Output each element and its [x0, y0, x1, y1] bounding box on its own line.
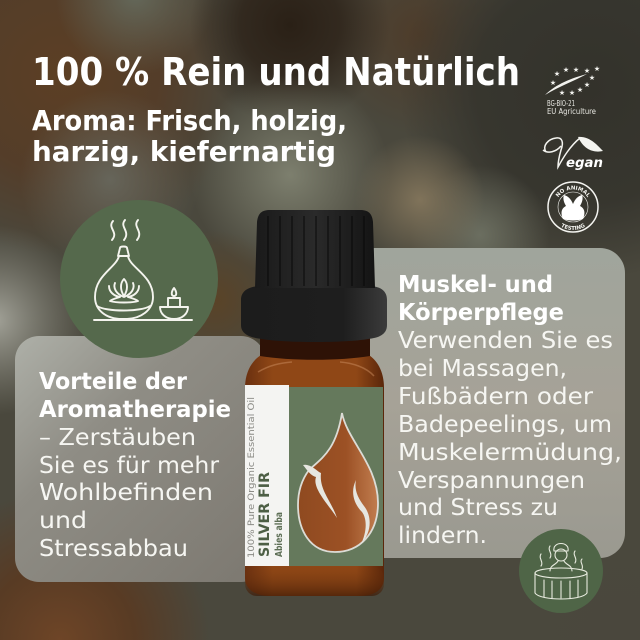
icon: EU organic leaf logo: ★: [584, 67, 590, 75]
text block: muscle and body care: Muskel- und: [398, 272, 553, 298]
text block: muscle and body care: Verspannungen: [398, 468, 585, 494]
text block: muscle and body care: Badepeelings, um: [398, 412, 612, 438]
label text: latin name: Abies alba: [274, 512, 285, 557]
title: 100 % Rein und Natürlich: [32, 50, 520, 94]
bottle: [241, 210, 387, 596]
icon: EU organic leaf logo: ★: [589, 74, 595, 82]
text block: muscle and body care: Muskelermüdung,: [398, 440, 622, 466]
icon: no animal testing logo: NO ANIMAL: [556, 186, 590, 198]
icon: vegan logo: [543, 137, 603, 171]
text block: aromatherapy benefits: Stressabbau: [39, 536, 188, 562]
icon: EU organic leaf logo: ★: [594, 65, 600, 73]
panel: muscle and body care: [350, 248, 625, 558]
text block: aromatherapy benefits: Wohlbefinden: [39, 480, 213, 506]
black screw cap: [255, 210, 375, 288]
icon: no animal testing logo: [547, 181, 599, 233]
text block: muscle and body care: Körperpflege: [398, 300, 564, 326]
icon: bath tub in green circle: [519, 529, 603, 613]
subtitle: aroma: [32, 104, 347, 168]
icon: EU organic leaf logo: ★: [554, 70, 560, 78]
text block: muscle and body care: Fußbädern oder: [398, 384, 594, 410]
icon: diffuser in green circle: [60, 200, 218, 358]
cap ribs: [268, 216, 364, 286]
subtitle: aroma: Aroma: Frisch, holzig,: [32, 104, 347, 137]
bottle neck: [260, 338, 370, 360]
text block: aromatherapy benefits: [39, 369, 231, 562]
label text: organic oil line: 100% Pure Organic Essential Oil: [247, 397, 257, 558]
icon: no animal testing logo: TESTING: [562, 223, 585, 230]
dropper collar: [241, 286, 387, 342]
icon: EU organic leaf logo: ★: [563, 66, 569, 74]
bottle glass: [245, 351, 384, 596]
text block: aromatherapy benefits: und: [39, 508, 87, 534]
icon: EU organic leaf logo: ★: [569, 89, 575, 97]
icon: EU organic leaf logo: ★: [573, 66, 579, 74]
icon: label drop: [298, 413, 378, 552]
label text: product name: SILVER FIR: [257, 472, 273, 557]
subtitle: aroma: harzig, kiefernartig: [32, 135, 336, 168]
icon: EU organic leaf logo: EU Agriculture: [547, 107, 596, 116]
text block: muscle and body care: bei Massagen,: [398, 356, 567, 382]
text block: muscle and body care: und Stress zu: [398, 495, 558, 521]
text block: muscle and body care: Verwenden Sie es: [398, 328, 613, 354]
label: green panel: [289, 387, 383, 566]
text block: aromatherapy benefits: Aromatherapie: [39, 397, 231, 423]
label: white strip: [245, 385, 289, 566]
text block: muscle and body care: [398, 272, 622, 549]
icon: vegan logo: egan: [566, 156, 603, 171]
icon: EU organic leaf logo: ★: [577, 86, 583, 94]
text block: aromatherapy benefits: Sie es für mehr: [39, 453, 220, 479]
text block: muscle and body care: lindern.: [398, 523, 487, 549]
icon: EU organic leaf logo: ★: [559, 89, 565, 97]
icon: EU organic leaf logo: ★: [584, 81, 590, 89]
text block: aromatherapy benefits: Vorteile der: [39, 369, 188, 395]
icon: EU organic leaf logo: [545, 65, 600, 116]
panel: aromatherapy benefits: [15, 336, 265, 582]
icon: EU organic leaf logo: ★: [550, 79, 556, 87]
icon: EU organic leaf logo: BG-BIO-21: [547, 99, 575, 108]
text block: aromatherapy benefits: – Zerstäuben: [39, 425, 196, 451]
